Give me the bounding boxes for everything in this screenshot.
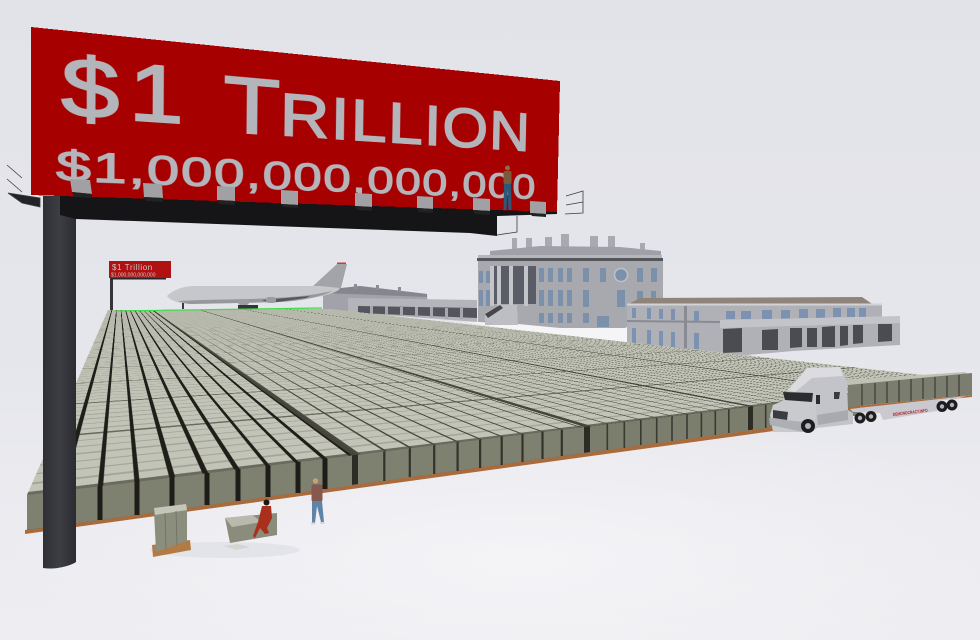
- section three of stacks: [199, 309, 750, 426]
- far building behind the field: [323, 284, 477, 322]
- truck trailer with lettering: DEMONOCRACY.INFO: [893, 408, 928, 417]
- section five of stacks: [287, 309, 969, 392]
- single pallet of money: [152, 504, 191, 557]
- bright ground around the White House: [465, 322, 640, 348]
- money field: top surface in perspective: [27, 309, 969, 495]
- small distant billboard: [109, 261, 171, 311]
- seated woman in red dress: [253, 500, 272, 538]
- White House west wing: [627, 297, 900, 355]
- section four of stacks: [244, 309, 871, 406]
- shadow of pallet and seat on ground: [150, 542, 300, 558]
- headline: $1 Trillion: [60, 40, 532, 163]
- small distant billboard: $1 Trillion: [112, 263, 153, 272]
- money seat: [224, 513, 277, 550]
- billboard platform left and railings: [7, 165, 583, 235]
- billboard panel: [31, 27, 560, 212]
- truck cab: [769, 367, 853, 433]
- worker standing on the billboard walkway: [504, 166, 512, 210]
- section two of stacks: [153, 310, 585, 455]
- billboard lights: [70, 179, 546, 217]
- White House: [477, 234, 663, 328]
- green far edge of the field: [115, 308, 322, 311]
- billboard pole: [43, 196, 76, 569]
- full figure: $1,000,000,000,000: $1,000,000,000,000: [56, 142, 537, 207]
- section one of stacks: [27, 310, 352, 495]
- standing man: [311, 478, 324, 524]
- small distant billboard: $1,000,000,000,000: [111, 272, 156, 278]
- truck trailer with lettering: [850, 396, 966, 424]
- airplane: [167, 262, 347, 309]
- money load on the truck trailer: [845, 372, 972, 409]
- billboard support beam: [60, 192, 557, 236]
- headline: $1 Trillion: TRILLION: [223, 59, 532, 163]
- headline: $1 Trillion: $1: [61, 40, 193, 141]
